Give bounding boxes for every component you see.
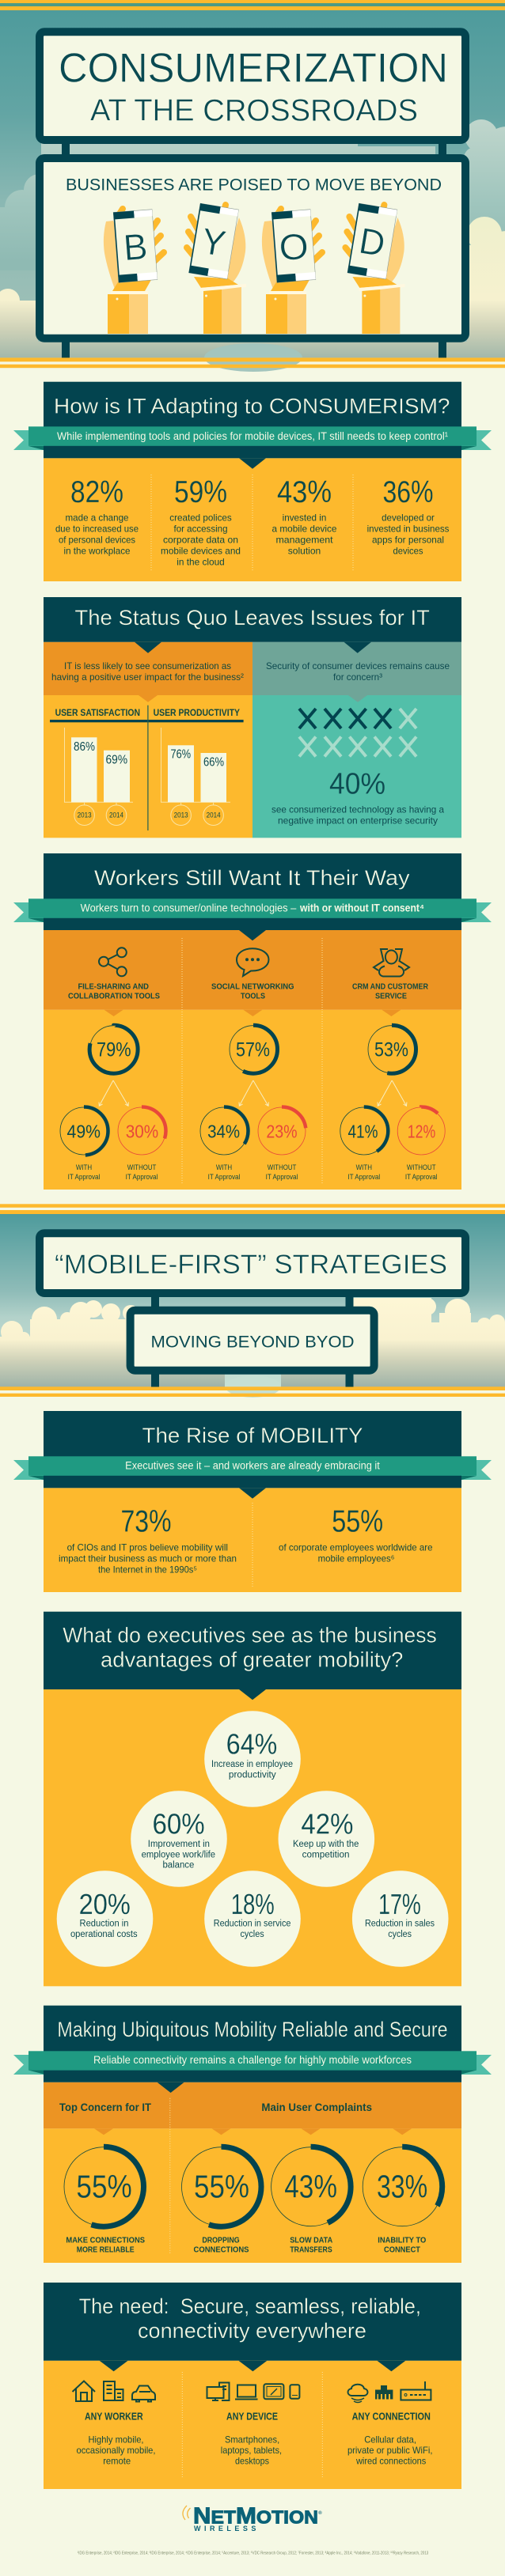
top stripes [0,0,505,10]
bubble 42% [279,1791,374,1887]
bubble 42%: Keep up with the [293,1840,359,1849]
sign posts [151,1296,353,1387]
stat 82%: made a change [65,512,129,523]
ring 43% slow data transfers: 43% [284,2168,337,2204]
right intro text: Security of consumer devices remains cause [266,660,450,671]
column labels: CRM AND CUSTOMER [352,982,428,991]
stat 73%: impact their business as much or more than [59,1553,237,1564]
stat 82%: in the workplace [63,545,131,556]
any worker text: occasionally mobile, [76,2445,155,2456]
bar chart: user productivity: 2013 [174,811,188,820]
left intro text: IT is less likely to see consumerization as [64,660,231,671]
bubble 60%: 60% [152,1808,205,1840]
hand holding phone B: B [122,225,149,268]
any worker text [76,2411,155,2466]
bar chart: user satisfaction: 2014 [109,811,123,820]
ring 55% top concern: MAKE CONNECTIONS [66,2236,145,2245]
stat 59%: created polices [169,512,232,523]
column headings: USER SATISFACTION [55,709,140,718]
bubble 20%: operational costs [70,1930,138,1939]
stat 59% [161,475,241,567]
heading: The Status Quo Leaves Issues for IT [74,606,430,630]
stat 82%: of personal devices [59,534,135,545]
stat 43%: 43% [277,475,332,509]
icon: people [374,949,409,976]
ring 41% with IT approval: WITH [356,1163,372,1172]
bubble 64%: 64% [226,1728,277,1761]
ribbon [13,2051,492,2075]
any connection text: Cellular data, [364,2434,416,2445]
bubble 20% [57,1871,153,1967]
ribbon [13,898,492,922]
ring 43% slow data transfers [271,2147,351,2255]
bar chart: user productivity: 66% [203,755,224,769]
banner: mobile-first strategies [0,1214,505,1398]
bubble 60%: balance [162,1861,194,1871]
ring 12% without IT approval: IT Approval [405,1173,438,1182]
any device text: Smartphones, [225,2434,279,2445]
ring 33% inability to connect: 33% [377,2168,427,2204]
logo: NetMotion Wireless: WIRELESS [194,2525,256,2532]
ring 57% [230,1025,277,1073]
column labels: SERVICE [375,991,407,1001]
any worker text: Highly mobile, [89,2434,144,2445]
stat 40%: negative impact on enterprise security [278,815,438,826]
arrows [99,1080,407,1106]
bubble 17%: 17% [378,1888,421,1920]
stat 36%: invested in business [367,523,449,534]
sign: title: CONSUMERIZATION [59,45,448,91]
hand holding phone Y [187,203,246,334]
column headings: Main User Complaints [261,2101,372,2113]
heading: connectivity everywhere [138,2319,366,2343]
bar chart: user productivity: 76% [171,747,191,761]
heading: The Rise of MOBILITY [142,1424,363,1447]
ring 34% with IT approval [199,1107,249,1182]
stat 55%: of corporate employees worldwide are [279,1541,433,1553]
ring 34% with IT approval: IT Approval [208,1173,240,1182]
sign: mobile-first [40,1233,465,1293]
icon: share [99,948,127,976]
panel: reliable and secure [13,2006,492,2263]
stat 73% [59,1505,237,1575]
ring 30% without IT approval: 30% [126,1121,158,1141]
panel: the need [44,2283,461,2489]
ring 55% top concern: 55% [76,2168,132,2204]
stat 43%: management [275,534,333,545]
stat 43% [272,475,337,556]
any device text: laptops, tablets, [221,2445,282,2456]
ring 33% inability to connect: INABILITY TO [378,2236,426,2245]
column headings: Top Concern for IT [59,2101,151,2113]
ribbon [13,426,492,450]
heading [63,1624,437,1671]
stat 36%: 36% [383,475,434,509]
bar chart: user satisfaction [64,728,133,826]
column labels: FILE-SHARING AND [78,982,149,991]
column labels: SOCIAL NETWORKING [211,982,294,991]
bubble 64%: Increase in employee [211,1760,293,1769]
bubble 18%: Reduction in service [214,1920,290,1929]
hand holding phone D [345,203,404,334]
stat 55% [279,1505,433,1564]
column labels: COLLABORATION TOOLS [68,991,160,1001]
stat 40%: see consumerized technology as having a [271,804,444,815]
any device text [221,2411,282,2466]
ring 33% inability to connect: CONNECT [384,2245,421,2255]
bar chart: user productivity [161,728,230,826]
ring 12% without IT approval: 12% [408,1121,435,1141]
any connection text: wired connections [355,2455,426,2466]
stat 59%: in the cloud [177,556,225,567]
ring 49% with IT approval: 49% [67,1121,101,1141]
column headings [59,2101,372,2113]
stat 55%: 55% [332,1505,383,1539]
ring 30% without IT approval: IT Approval [126,1173,158,1182]
logo: NetMotion Wireless: NETMOTION [193,2504,318,2529]
bubble 17%: Reduction in sales [365,1920,435,1929]
hand holding phone B [104,209,164,334]
panel: workers still want it their way [13,853,492,1190]
any connection text [347,2411,432,2466]
ring 23% without IT approval: 23% [266,1121,298,1141]
ring 12% without IT approval [397,1107,446,1182]
ring 55% dropping connections: 55% [194,2168,249,2204]
stat 36%: developed or [382,512,435,523]
hand holding phone O [262,209,322,334]
any device text: ANY DEVICE [226,2411,278,2422]
ring 55% dropping connections [181,2147,261,2255]
ring 43% slow data transfers: TRANSFERS [290,2245,332,2255]
ring 41% with IT approval [340,1107,388,1182]
ring 23% without IT approval [258,1107,306,1182]
bubble 42%: competition [302,1850,350,1859]
bubble 17%: cycles [388,1930,412,1939]
stat 40% [271,767,444,826]
bar chart: user satisfaction: 2013 [78,811,92,820]
bar chart: user satisfaction: 69% [106,754,127,767]
ring 55% top concern [63,2147,145,2255]
ring 43% slow data transfers: SLOW DATA [290,2236,333,2245]
icons: home, office, car [73,2381,155,2401]
stripes around mobile-first banner [0,1204,505,1397]
stat 43%: solution [288,545,321,556]
hand holding phone D: D [356,220,388,264]
ring 57%: 57% [236,1039,270,1061]
ring 49% with IT approval [60,1107,108,1182]
bar chart: user productivity: 2014 [207,811,221,820]
stat 59%: 59% [174,475,227,509]
sign: moving beyond byod: MOVING BEYOND BYOD [150,1332,355,1351]
ring 55% dropping connections: CONNECTIONS [193,2245,249,2255]
column labels: TOOLS [241,991,265,1001]
logo: NetMotion Wireless: ® [318,2510,322,2516]
bubble 18%: cycles [241,1930,264,1939]
panel: status quo [44,597,461,838]
hand holding phone O: O [278,225,310,268]
ring 23% without IT approval: WITHOUT [268,1163,296,1172]
bubble 64% [204,1711,301,1807]
left intro text [51,660,244,683]
stat 36%: apps for personal [372,534,444,545]
stat 59%: corporate data on [163,534,238,545]
heading: Making Ubiquitous Mobility Reliable and Secure [57,2018,448,2041]
right intro text [266,660,450,683]
ribbon [13,1456,492,1480]
stat 55%: mobile employees⁶ [318,1553,394,1564]
heading: What do executives see as the business [63,1624,437,1647]
stat 82%: due to increased use [55,523,139,534]
icon: ten X marks [299,709,416,756]
any connection text: private or public WiFi, [347,2445,432,2456]
sign: title: AT THE CROSSROADS [90,94,418,128]
ring 53%: 53% [374,1039,408,1061]
ring 49% with IT approval: WITH [76,1163,92,1172]
bar chart: user satisfaction: 86% [74,740,95,754]
ring 30% without IT approval [117,1107,166,1182]
heading: advantages of greater mobility? [101,1647,403,1671]
bubble 60% [131,1791,227,1887]
ribbon: Executives see it – and workers are already embracing it [125,1459,380,1471]
ring 41% with IT approval: IT Approval [347,1173,380,1182]
panel: rise of mobility [13,1411,492,1592]
ring 30% without IT approval: WITHOUT [127,1163,156,1172]
ring 55% top concern: MORE RELIABLE [77,2245,135,2255]
icons: cloud wifi, ethernet, router [348,2381,431,2403]
sign: mobile-first: “MOBILE-FIRST” STRATEGIES [55,1250,447,1280]
heading: Workers Still Want It Their Way [94,866,410,890]
column headings [50,705,244,830]
any connection text: ANY CONNECTION [352,2411,431,2422]
ring 55% dropping connections: DROPPING [202,2236,240,2245]
ring 41% with IT approval: 41% [348,1121,378,1141]
ring 34% with IT approval: WITH [216,1163,232,1172]
stat 36%: devices [393,545,423,556]
icons: desktop, laptop, tablet, phone [207,2382,299,2400]
sign: title [40,32,465,140]
stat 59%: mobile devices and [161,545,241,556]
subtitle: BUSINESSES ARE POISED TO MOVE BEYOND [66,176,442,195]
hand holding phone Y: Y [199,220,229,264]
sign: moving beyond byod [131,1311,374,1371]
stat 59%: for accessing [174,523,228,534]
heading: How is IT Adapting to CONSUMERISM? [54,394,450,418]
stat 73%: the Internet in the 1990s⁵ [98,1564,197,1575]
bubble 20%: 20% [79,1888,131,1920]
ribbon: with or without IT consent⁴ [299,902,424,914]
bubble 42%: 42% [301,1808,353,1840]
panel: how is IT adapting [13,382,492,581]
stat 40%: 40% [329,767,385,800]
bubble 18% [204,1871,301,1967]
column headings: USER PRODUCTIVITY [154,709,240,718]
heading: The need: Secure, seamless, reliable, [79,2294,421,2318]
ribbon: Reliable connectivity remains a challenge for highly mobile workforces [93,2054,412,2066]
bubble 60%: Improvement in [148,1840,210,1849]
ribbon: While implementing tools and policies for mobile devices, IT still needs to keep control¹ [57,430,448,442]
column labels [68,982,428,1001]
left intro text: having a positive user impact for the business² [51,671,244,683]
bottom stripes of header [0,357,505,368]
any worker text: ANY WORKER [85,2411,143,2422]
header banner: consumerization at the crossroads [0,10,505,372]
bubble 17% [352,1871,448,1967]
right intro text: for concern³ [333,671,382,683]
panel: business advantages of mobility [44,1612,461,1986]
heading [79,2294,421,2343]
bubble 60%: employee work/life [142,1850,215,1859]
stat 73%: 73% [120,1505,171,1539]
bubble 18%: 18% [231,1888,275,1920]
sign posts [62,142,446,357]
stat 43%: a mobile device [272,523,337,534]
stat 82% [55,475,139,556]
ribbon: Workers turn to consumer/online technologies – [81,902,297,914]
any device text: desktops [235,2455,269,2466]
sign: BYOD [40,158,465,339]
bubble 64%: productivity [229,1770,276,1780]
stat 43%: invested in [283,512,326,523]
any worker text: remote [103,2455,131,2466]
icon: speech bubble [237,948,269,976]
stat 82%: 82% [70,475,123,509]
stat 73%: of CIOs and IT pros believe mobility will [67,1541,228,1553]
ring 49% with IT approval: IT Approval [68,1173,100,1182]
ring 79% [89,1025,138,1073]
ring 34% with IT approval: 34% [207,1121,240,1141]
ring 79%: 79% [97,1039,131,1061]
footnotes: ¹IDG Enterprise, 2014; ²IDG Enterprise, 2014; ³IDG Enterprise, 2014; ⁴IDG Enterprise, 2014; ⁵Accenture, 2013; ⁶VDC Research Group, 2012; ⁷Forrester, 2013; ⁸Apple Inc., 2014; ⁹Vodafone, 2011-2013; ¹⁰Ryasy Research, 2013 [78,2551,428,2555]
stat 36% [367,475,449,556]
ring 33% inability to connect [363,2147,442,2255]
ring 23% without IT approval: IT Approval [266,1173,298,1182]
bubble 20%: Reduction in [80,1920,128,1929]
ring 53% [367,1025,416,1073]
ring 12% without IT approval: WITHOUT [407,1163,436,1172]
